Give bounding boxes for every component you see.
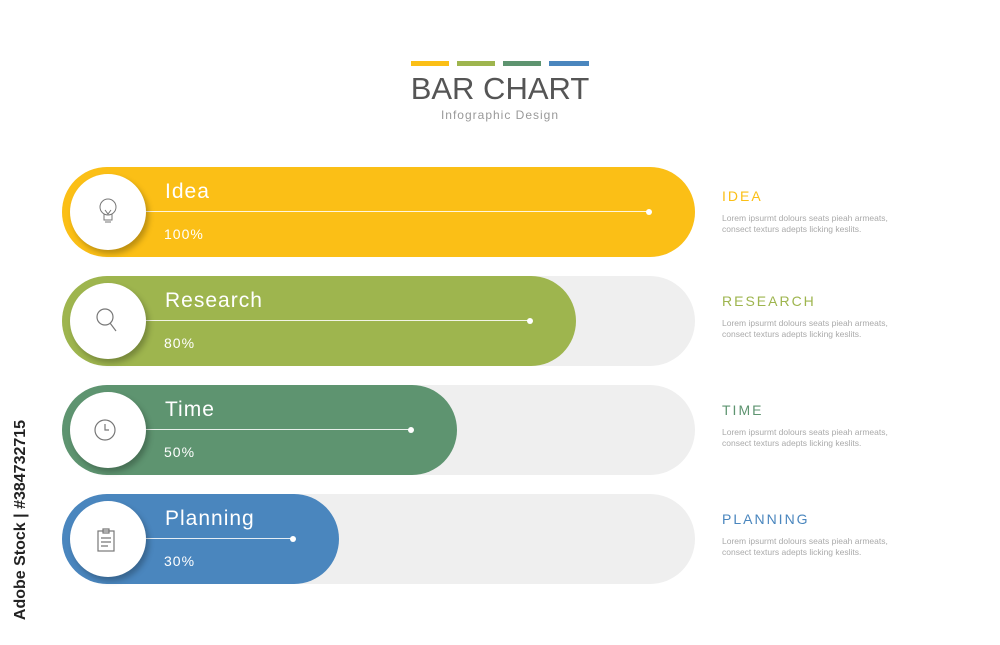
right text: planning (722, 511, 888, 557)
bar: research: 80% (164, 335, 195, 351)
text: RESEARCH (722, 293, 816, 309)
watermark side text: Adobe Stock | #384732715 (12, 420, 29, 620)
text: IDEA (722, 188, 763, 204)
bar: idea (62, 167, 695, 257)
text: Lorem ipsurmt dolours seats pieah armeats, (722, 318, 888, 328)
right text: idea (722, 188, 888, 234)
text: consect texturs adepts licking keslits. (722, 547, 861, 557)
bar: planning (62, 494, 695, 584)
bar: research (62, 276, 695, 366)
title: BAR CHART (411, 71, 589, 106)
text: consect texturs adepts licking keslits. (722, 438, 861, 448)
icon: clock (70, 392, 146, 468)
text: Lorem ipsurmt dolours seats pieah armeats, (722, 536, 888, 546)
right text: time (722, 402, 888, 448)
bar: research: Research (165, 289, 263, 312)
text: TIME (722, 402, 763, 418)
text: consect texturs adepts licking keslits. (722, 224, 861, 234)
bar: planning: Planning (165, 507, 255, 530)
text: Lorem ipsurmt dolours seats pieah armeats, (722, 213, 888, 223)
title accent bars (411, 61, 589, 66)
bar: idea: 100% (164, 226, 204, 242)
bar: planning: 30% (164, 553, 195, 569)
bar: idea: Idea (165, 180, 210, 203)
icon: clipboard (70, 501, 146, 577)
text: Lorem ipsurmt dolours seats pieah armeats, (722, 427, 888, 437)
subtitle: Infographic Design (441, 108, 559, 122)
icon: bulb (70, 174, 146, 250)
right text: research (722, 293, 888, 339)
icon: magnifier (70, 283, 146, 359)
text: PLANNING (722, 511, 810, 527)
bar: time: Time (165, 398, 215, 421)
text: consect texturs adepts licking keslits. (722, 329, 861, 339)
bar: time: 50% (164, 444, 195, 460)
bar: time (62, 385, 695, 475)
